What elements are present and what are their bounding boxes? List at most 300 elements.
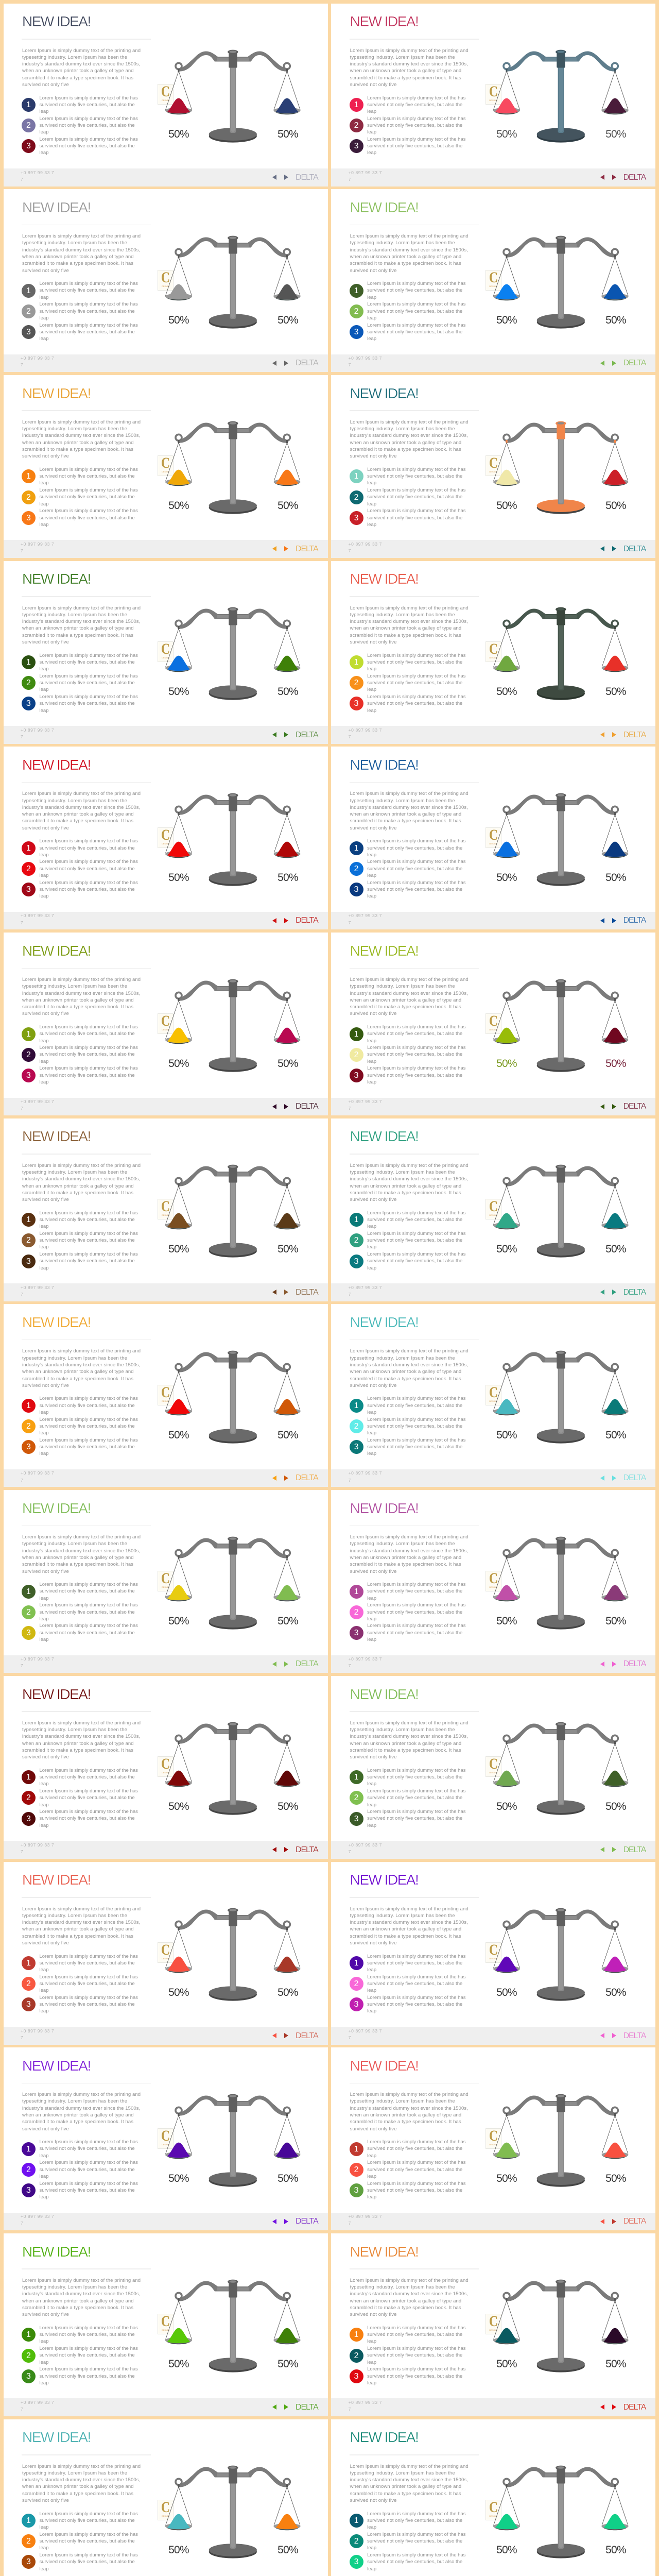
body text: scrambled it to make a type specimen book. It has bbox=[22, 261, 133, 266]
list item 1: survived not only five centuries, but also the bbox=[39, 1960, 135, 1966]
list item 1 bbox=[350, 1395, 476, 1416]
list item 2: survived not only five centuries, but also the bbox=[39, 494, 135, 500]
list item 3: leap bbox=[39, 2194, 49, 2200]
list item 2: Lorem Ipsum is simply dummy text of the has bbox=[367, 1602, 466, 1608]
list item 2: Lorem Ipsum is simply dummy text of the has bbox=[367, 116, 466, 122]
list item 1: survived not only five centuries, but also the bbox=[367, 659, 462, 665]
list item 3: leap bbox=[367, 1637, 376, 1642]
list item 2: leap bbox=[367, 315, 376, 321]
watermark bbox=[158, 827, 174, 848]
watermark bbox=[485, 455, 501, 476]
footer bar: DELTA bbox=[623, 2031, 646, 2040]
body text: survived not only five bbox=[22, 1197, 69, 1202]
body text bbox=[350, 790, 479, 832]
chart: balance scale: 50% bbox=[278, 872, 298, 884]
watermark: DESIGN bbox=[489, 1771, 497, 1774]
footer bar bbox=[3, 1097, 327, 1115]
list item 1: leap bbox=[39, 852, 49, 858]
chart: balance scale bbox=[154, 1533, 309, 1636]
list item 2: leap bbox=[39, 1430, 49, 1436]
footer bar: 7 bbox=[349, 1849, 351, 1854]
watermark bbox=[485, 1013, 501, 1033]
watermark bbox=[158, 641, 174, 662]
footer bar: DELTA bbox=[623, 2217, 646, 2226]
footer bar: 7 bbox=[349, 2406, 351, 2412]
list item 3: Lorem Ipsum is simply dummy text of the has bbox=[367, 2552, 466, 2558]
list item 2: survived not only five centuries, but also the bbox=[367, 1238, 462, 1243]
list item 1 bbox=[350, 1953, 476, 1973]
chart: balance scale bbox=[482, 1161, 637, 1264]
list item 1: Lorem Ipsum is simply dummy text of the has bbox=[39, 1210, 138, 1216]
list item 2: 2 bbox=[26, 1422, 31, 1431]
footer bar: DELTA bbox=[623, 731, 646, 739]
heading: NEW IDEA! bbox=[22, 2429, 91, 2445]
list item 3: 3 bbox=[354, 142, 359, 150]
body text: scrambled it to make a type specimen book. It has bbox=[22, 75, 133, 81]
body text: typesetting industry. Lorem Ipsum has been the bbox=[22, 1170, 127, 1175]
list item 1 bbox=[22, 1024, 148, 1044]
footer bar bbox=[3, 168, 327, 187]
body text: when an unknown printer took a galley of type and bbox=[22, 2484, 134, 2489]
watermark: DESIGN bbox=[489, 656, 497, 659]
body text: scrambled it to make a type specimen book. It has bbox=[22, 2119, 133, 2125]
body text: typesetting industry. Lorem Ipsum has been the bbox=[350, 798, 455, 804]
list item 3: survived not only five centuries, but also the bbox=[367, 143, 462, 149]
watermark bbox=[158, 455, 174, 476]
chart: balance scale: 50% bbox=[168, 872, 189, 884]
list item 3 bbox=[22, 1065, 148, 1086]
body text: typesetting industry. Lorem Ipsum has been the bbox=[350, 426, 455, 432]
list item 3: leap bbox=[367, 522, 376, 528]
list item 2: survived not only five centuries, but also the bbox=[367, 1609, 462, 1615]
list item 1: survived not only five centuries, but also the bbox=[367, 2518, 462, 2523]
list item 2: leap bbox=[367, 1059, 376, 1064]
watermark: DESIGN bbox=[162, 1957, 169, 1960]
watermark bbox=[485, 827, 501, 848]
list item 3 bbox=[22, 508, 138, 528]
list item 3: leap bbox=[39, 1637, 49, 1642]
chart: balance scale: 50% bbox=[605, 2358, 626, 2370]
list item 2: leap bbox=[367, 2174, 376, 2179]
footer bar: 7 bbox=[349, 362, 351, 367]
watermark: DESIGN bbox=[162, 1214, 169, 1216]
footer bar: +0 897 99 33 7 bbox=[349, 541, 382, 547]
list item 1: survived not only five centuries, but also the bbox=[39, 287, 135, 293]
chart: balance scale: 50% bbox=[496, 1987, 517, 1998]
list item 2: 2 bbox=[26, 493, 31, 502]
list item 1: Lorem Ipsum is simply dummy text of the has bbox=[39, 2325, 138, 2331]
list item 1 bbox=[350, 838, 476, 858]
body text: typesetting industry. Lorem Ipsum has been the bbox=[22, 612, 127, 618]
list item 1 bbox=[22, 653, 138, 672]
panel: slide 13 bbox=[3, 1118, 327, 1301]
list item 2: 2 bbox=[26, 865, 31, 873]
heading: NEW IDEA! bbox=[22, 943, 91, 959]
list item 2: 2 bbox=[26, 1236, 31, 1245]
list item 2: 2 bbox=[354, 1608, 359, 1617]
list item 1 bbox=[22, 1210, 148, 1230]
body text: scrambled it to make a type specimen book. It has bbox=[22, 1562, 133, 1567]
list item 1: 1 bbox=[26, 658, 31, 667]
body text: scrambled it to make a type specimen book. It has bbox=[350, 1934, 461, 1939]
footer bar: +0 897 99 33 7 bbox=[21, 913, 54, 918]
list item 3 bbox=[22, 1437, 148, 1458]
list item 2 bbox=[22, 1602, 148, 1622]
footer bar: DELTA bbox=[296, 545, 318, 553]
list item 2: 2 bbox=[354, 1236, 359, 1245]
watermark bbox=[485, 1571, 501, 1591]
chart: balance scale bbox=[165, 607, 301, 700]
list item 1: 1 bbox=[26, 2330, 31, 2339]
heading: NEW IDEA! bbox=[350, 1314, 418, 1330]
list item 3: leap bbox=[39, 893, 49, 899]
heading: NEW IDEA! bbox=[22, 1500, 91, 1516]
panel: slide 9 bbox=[3, 747, 327, 929]
list item 2 bbox=[22, 1230, 148, 1251]
body text: Lorem Ipsum is simply dummy text of the printing and bbox=[350, 1348, 469, 1354]
list item 1 bbox=[350, 1024, 476, 1044]
list item 2: 2 bbox=[354, 493, 359, 502]
footer bar: +0 897 99 33 7 bbox=[21, 1842, 54, 1848]
body text: industry's standard dummy text ever since the 1500s, bbox=[22, 2291, 140, 2297]
body text: industry's standard dummy text ever since the 1500s, bbox=[350, 2106, 468, 2111]
footer bar: DELTA bbox=[296, 359, 318, 367]
list item 3: Lorem Ipsum is simply dummy text of the has bbox=[367, 508, 466, 514]
list item 1 bbox=[22, 2139, 148, 2159]
body text: survived not only five bbox=[350, 1754, 397, 1760]
heading: NEW IDEA! bbox=[350, 571, 418, 587]
chart: balance scale bbox=[482, 1533, 637, 1636]
chart: balance scale: 50% bbox=[496, 128, 517, 140]
body text: typesetting industry. Lorem Ipsum has been the bbox=[22, 2470, 127, 2476]
watermark: DESIGN bbox=[162, 1400, 169, 1402]
list item 2 bbox=[22, 858, 148, 879]
list item 3: leap bbox=[39, 1451, 49, 1456]
body text: survived not only five bbox=[22, 1569, 69, 1574]
list item 2: survived not only five centuries, but also the bbox=[39, 1052, 135, 1057]
body text: typesetting industry. Lorem Ipsum has been the bbox=[22, 1913, 127, 1919]
body text: Lorem Ipsum is simply dummy text of the printing and bbox=[22, 2464, 141, 2469]
list item 3: leap bbox=[39, 522, 49, 528]
list item 3: leap bbox=[367, 2380, 376, 2386]
list item 1: survived not only five centuries, but also the bbox=[367, 287, 462, 293]
footer bar: DELTA bbox=[296, 731, 318, 739]
list item 2 bbox=[350, 2345, 476, 2366]
list item 2: leap bbox=[39, 129, 49, 135]
list item 2: Lorem Ipsum is simply dummy text of the has bbox=[39, 2346, 138, 2351]
list item 3: Lorem Ipsum is simply dummy text of the has bbox=[39, 508, 138, 514]
list item 2 bbox=[22, 673, 138, 692]
list item 1: Lorem Ipsum is simply dummy text of the has bbox=[39, 1024, 138, 1030]
list item 1 bbox=[22, 95, 138, 114]
footer bar: DELTA bbox=[296, 1845, 318, 1854]
list item 1: 1 bbox=[26, 1959, 31, 1968]
panel: slide 3 bbox=[3, 189, 327, 372]
footer bar: 7 bbox=[21, 177, 23, 182]
body text: when an unknown printer took a galley of type and bbox=[22, 1741, 134, 1747]
list item 3: Lorem Ipsum is simply dummy text of the has bbox=[367, 880, 466, 886]
list item 2 bbox=[350, 116, 466, 135]
list item 1: 1 bbox=[26, 100, 31, 109]
list item 1: leap bbox=[39, 2153, 49, 2159]
list item 3 bbox=[350, 879, 476, 900]
list item 3 bbox=[350, 2180, 476, 2201]
panel: slide 16 bbox=[331, 1304, 655, 1487]
chart: balance scale: 50% bbox=[168, 128, 189, 140]
list item 1: Lorem Ipsum is simply dummy text of the has bbox=[39, 1396, 138, 1401]
list item 2 bbox=[350, 1974, 476, 1994]
body text: survived not only five bbox=[350, 268, 397, 274]
list item 2: Lorem Ipsum is simply dummy text of the has bbox=[367, 1417, 466, 1422]
body text: typesetting industry. Lorem Ipsum has been the bbox=[22, 1355, 127, 1361]
list item 1: leap bbox=[39, 2524, 49, 2530]
list item 1 bbox=[22, 1767, 148, 1788]
footer bar: 7 bbox=[21, 2406, 23, 2412]
body text: Lorem Ipsum is simply dummy text of the printing and bbox=[350, 2278, 469, 2283]
footer bar bbox=[3, 2213, 327, 2230]
list item 2 bbox=[22, 1788, 148, 1808]
watermark: DESIGN bbox=[489, 1214, 497, 1216]
list item 3: survived not only five centuries, but also the bbox=[39, 701, 135, 706]
list item 1: leap bbox=[39, 1596, 49, 1601]
heading: NEW IDEA! bbox=[22, 1686, 91, 1702]
panel: slide 28 bbox=[331, 2419, 655, 2576]
footer bar bbox=[3, 2027, 327, 2044]
list item 3: 3 bbox=[354, 2186, 359, 2195]
heading: NEW IDEA! bbox=[350, 757, 418, 773]
panel: slide 5 bbox=[3, 375, 327, 558]
body text: Lorem Ipsum is simply dummy text of the printing and bbox=[22, 605, 141, 611]
panel: slide 7 bbox=[3, 561, 327, 744]
list item 2 bbox=[22, 2345, 148, 2366]
list item 1: 1 bbox=[26, 1029, 31, 1039]
list item 2 bbox=[350, 1044, 476, 1065]
footer bar: 7 bbox=[349, 1292, 351, 1297]
chart: balance scale: 50% bbox=[496, 314, 517, 326]
chart: balance scale: 50% bbox=[605, 2544, 626, 2556]
list item 2 bbox=[22, 301, 138, 321]
list item 1: survived not only five centuries, but also the bbox=[39, 659, 135, 665]
list item 3: 3 bbox=[354, 1443, 359, 1451]
panel: slide 4 bbox=[331, 189, 655, 372]
body text: Lorem Ipsum is simply dummy text of the printing and bbox=[350, 1163, 469, 1168]
panel: slide 15 bbox=[3, 1304, 327, 1487]
footer bar bbox=[3, 2398, 327, 2416]
chart: balance scale: 50% bbox=[278, 1429, 298, 1441]
watermark: DESIGN bbox=[489, 1400, 497, 1402]
heading: NEW IDEA! bbox=[22, 757, 91, 773]
list item 2: leap bbox=[367, 1802, 376, 1808]
body text bbox=[22, 2091, 151, 2132]
list item 1: survived not only five centuries, but also the bbox=[367, 1031, 462, 1037]
watermark bbox=[485, 1756, 501, 1777]
list item 3 bbox=[22, 1622, 148, 1643]
list item 2 bbox=[350, 673, 466, 692]
chart: balance scale bbox=[482, 1719, 637, 1822]
chart: balance scale: 50% bbox=[278, 2173, 298, 2184]
list item 1: survived not only five centuries, but also the bbox=[39, 2332, 135, 2337]
list item 1 bbox=[22, 1953, 148, 1973]
list item 1: leap bbox=[39, 295, 49, 300]
list item 3: Lorem Ipsum is simply dummy text of the has bbox=[39, 2181, 138, 2187]
body text: industry's standard dummy text ever since the 1500s, bbox=[22, 1920, 140, 1925]
footer bar: +0 897 99 33 7 bbox=[349, 170, 382, 175]
footer bar bbox=[331, 1655, 655, 1673]
list item 3 bbox=[350, 1808, 476, 1829]
body text: when an unknown printer took a galley of type and bbox=[350, 1555, 461, 1561]
list item 1 bbox=[22, 2325, 148, 2345]
panel: slide 23 bbox=[3, 2047, 327, 2230]
heading: NEW IDEA! bbox=[350, 2429, 418, 2445]
list item 2: Lorem Ipsum is simply dummy text of the has bbox=[39, 1602, 138, 1608]
body text: Lorem Ipsum is simply dummy text of the printing and bbox=[22, 233, 141, 239]
list item 1: leap bbox=[367, 1224, 376, 1229]
list item 2: survived not only five centuries, but also the bbox=[39, 123, 135, 128]
list item 3: leap bbox=[367, 1451, 376, 1456]
panel: slide 21 bbox=[3, 1862, 327, 2044]
list item 3: leap bbox=[367, 336, 376, 342]
watermark: DESIGN bbox=[162, 470, 169, 473]
footer bar: +0 897 99 33 7 bbox=[349, 1656, 382, 1662]
list item 1: leap bbox=[39, 480, 49, 486]
list item 1: Lorem Ipsum is simply dummy text of the has bbox=[367, 1024, 466, 1030]
list item 3 bbox=[350, 1065, 476, 1086]
body text: when an unknown printer took a galley of type and bbox=[22, 2112, 134, 2118]
list item 3: survived not only five centuries, but also the bbox=[367, 1444, 462, 1450]
list item 1: 1 bbox=[26, 1215, 31, 1224]
footer bar: 7 bbox=[21, 1849, 23, 1854]
list item 2 bbox=[350, 1788, 476, 1808]
list item 1: Lorem Ipsum is simply dummy text of the has bbox=[367, 2325, 466, 2331]
chart: balance scale: 50% bbox=[168, 1987, 189, 1998]
footer bar: DELTA bbox=[296, 2031, 318, 2040]
list item 3 bbox=[350, 508, 466, 528]
heading: NEW IDEA! bbox=[22, 2244, 91, 2260]
panel: slide 17 bbox=[3, 1490, 327, 1673]
list item 1: survived not only five centuries, but also the bbox=[367, 1403, 462, 1409]
list item 3: 3 bbox=[26, 885, 31, 894]
list item 1: leap bbox=[367, 1410, 376, 1415]
body text: Lorem Ipsum is simply dummy text of the printing and bbox=[350, 1720, 469, 1726]
list item 1: survived not only five centuries, but also the bbox=[39, 1217, 135, 1223]
list item 3: leap bbox=[39, 2008, 49, 2014]
footer bar: +0 897 99 33 7 bbox=[349, 1470, 382, 1476]
body text: scrambled it to make a type specimen book. It has bbox=[22, 447, 133, 452]
list item 3: survived not only five centuries, but also the bbox=[39, 143, 135, 149]
heading: NEW IDEA! bbox=[22, 1314, 91, 1330]
chart: balance scale: 50% bbox=[168, 500, 189, 512]
footer bar: 7 bbox=[349, 920, 351, 925]
list item 3: 3 bbox=[26, 2372, 31, 2381]
list item 3: Lorem Ipsum is simply dummy text of the has bbox=[39, 1065, 138, 1071]
list item 3: survived not only five centuries, but also the bbox=[39, 1444, 135, 1450]
body text: industry's standard dummy text ever since the 1500s, bbox=[22, 1548, 140, 1554]
chart: balance scale bbox=[154, 2462, 309, 2565]
body text: when an unknown printer took a galley of type and bbox=[350, 1369, 461, 1375]
body text: survived not only five bbox=[22, 1754, 69, 1760]
list item 2: 2 bbox=[354, 2165, 359, 2174]
list item 1: survived not only five centuries, but also the bbox=[39, 2146, 135, 2151]
chart: balance scale: 50% bbox=[605, 2173, 626, 2184]
body text bbox=[22, 1905, 151, 1946]
list item 2: leap bbox=[367, 687, 376, 692]
list item 2: 2 bbox=[354, 1793, 359, 1802]
list item 3: survived not only five centuries, but also the bbox=[367, 2002, 462, 2007]
list item 1: 1 bbox=[354, 844, 359, 853]
footer bar: +0 897 99 33 7 bbox=[21, 1470, 54, 1476]
list item 1: 1 bbox=[26, 844, 31, 853]
body text: scrambled it to make a type specimen book. It has bbox=[22, 1934, 133, 1939]
list item 1 bbox=[350, 1210, 476, 1230]
list item 2: 2 bbox=[354, 865, 359, 873]
list item 1 bbox=[350, 1581, 476, 1602]
heading: NEW IDEA! bbox=[350, 1872, 418, 1888]
list item 1: 1 bbox=[354, 2516, 359, 2525]
body text: industry's standard dummy text ever since the 1500s, bbox=[350, 247, 468, 253]
footer bar: 7 bbox=[349, 2035, 351, 2040]
list item 1: survived not only five centuries, but also the bbox=[39, 1031, 135, 1037]
chart: balance scale: 50% bbox=[496, 686, 517, 698]
footer bar: +0 897 99 33 7 bbox=[21, 2214, 54, 2219]
list item 2: 2 bbox=[26, 2351, 31, 2360]
list item 2: survived not only five centuries, but also the bbox=[367, 866, 462, 872]
body text: industry's standard dummy text ever since the 1500s, bbox=[22, 433, 140, 438]
panel: slide 25 bbox=[3, 2233, 327, 2416]
body text: when an unknown printer took a galley of type and bbox=[350, 1741, 461, 1747]
list item 2 bbox=[22, 487, 138, 507]
list item 3: 3 bbox=[354, 2372, 359, 2381]
heading: NEW IDEA! bbox=[350, 385, 418, 401]
heading: NEW IDEA! bbox=[350, 13, 418, 29]
list item 2: Lorem Ipsum is simply dummy text of the has bbox=[367, 1231, 466, 1236]
list item 3: leap bbox=[367, 150, 376, 156]
chart: balance scale bbox=[154, 2276, 309, 2379]
watermark: DESIGN bbox=[162, 99, 169, 101]
body text bbox=[22, 1162, 151, 1203]
list item 2 bbox=[350, 1416, 476, 1437]
chart: balance scale: 50% bbox=[605, 872, 626, 884]
body text: when an unknown printer took a galley of type and bbox=[350, 2112, 461, 2118]
chart: balance scale: 50% bbox=[605, 1615, 626, 1627]
body text: survived not only five bbox=[22, 825, 69, 831]
list item 1: 1 bbox=[354, 286, 359, 295]
list item 2: Lorem Ipsum is simply dummy text of the has bbox=[367, 673, 466, 679]
list item 2: leap bbox=[39, 1988, 49, 1993]
footer bar: +0 897 99 33 7 bbox=[21, 541, 54, 547]
body text: when an unknown printer took a galley of type and bbox=[350, 440, 461, 446]
list item 3: leap bbox=[367, 2008, 376, 2014]
body text bbox=[22, 790, 151, 832]
body text: typesetting industry. Lorem Ipsum has been the bbox=[350, 55, 455, 60]
list item 1: survived not only five centuries, but also the bbox=[39, 2518, 135, 2523]
body text: Lorem Ipsum is simply dummy text of the printing and bbox=[22, 1534, 141, 1540]
list item 2: survived not only five centuries, but also the bbox=[367, 2167, 462, 2173]
body text: survived not only five bbox=[22, 453, 69, 459]
list item 1: survived not only five centuries, but also the bbox=[367, 102, 462, 108]
body text: scrambled it to make a type specimen book. It has bbox=[350, 1376, 461, 1382]
list item 2 bbox=[22, 2159, 148, 2180]
body text: when an unknown printer took a galley of type and bbox=[350, 1183, 461, 1189]
body text: typesetting industry. Lorem Ipsum has been the bbox=[22, 1727, 127, 1733]
list item 1: Lorem Ipsum is simply dummy text of the has bbox=[367, 95, 466, 101]
footer bar: +0 897 99 33 7 bbox=[21, 1099, 54, 1104]
footer bar: +0 897 99 33 7 bbox=[349, 1842, 382, 1848]
body text: when an unknown printer took a galley of type and bbox=[350, 2484, 461, 2489]
list item 3: Lorem Ipsum is simply dummy text of the has bbox=[39, 1809, 138, 1815]
list item 3: leap bbox=[39, 2566, 49, 2572]
list item 2: Lorem Ipsum is simply dummy text of the has bbox=[39, 1417, 138, 1422]
body text bbox=[350, 419, 469, 459]
